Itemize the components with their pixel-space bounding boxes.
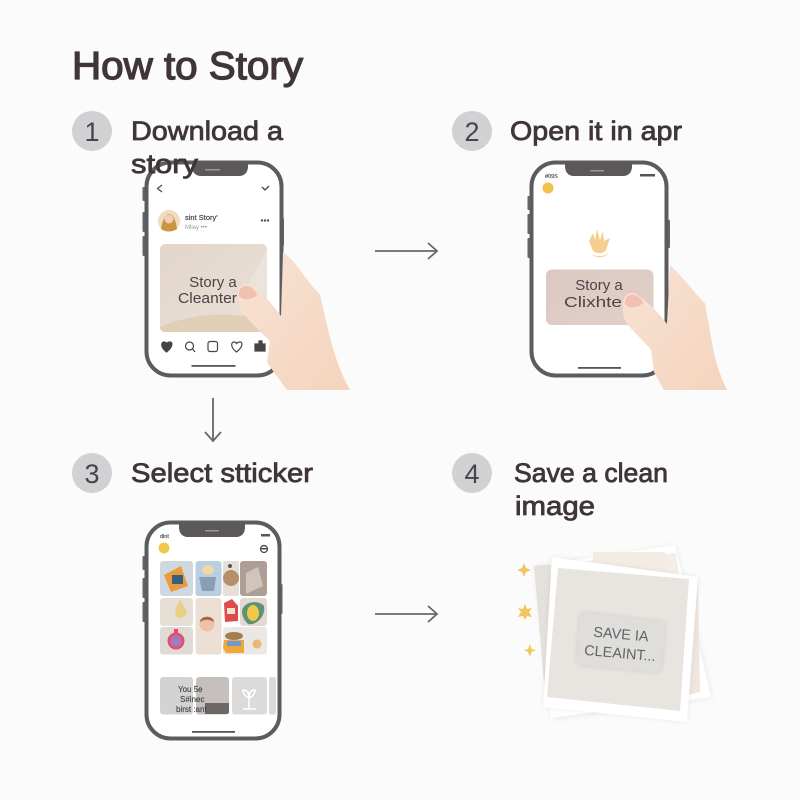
step 4 panel [452, 453, 713, 722]
step 1 heading: story [131, 149, 199, 179]
step 3 panel [72, 453, 313, 738]
profile name: sint Story' [185, 213, 218, 222]
post image card: Cleanter [178, 290, 237, 307]
step 2 hand [623, 265, 727, 390]
step 4 number badge: 4 [464, 459, 480, 489]
sparkle 2 [518, 604, 532, 620]
settings icon [260, 546, 268, 552]
step 2 sticker card: Clixhte [564, 294, 622, 311]
step 2 sticker card: Story a [575, 277, 623, 294]
step 2 phone [528, 162, 670, 376]
home indicator [192, 731, 235, 733]
yellow avatar [158, 542, 170, 554]
home indicator [578, 367, 621, 369]
waving hand icon [589, 229, 610, 257]
arrow: step 3 to step 4 [375, 606, 437, 622]
sticker grid: birst :ant [176, 705, 207, 714]
back chevron [158, 185, 162, 192]
saved sticker label: CLEAINT... [583, 643, 656, 665]
status time: #09S [545, 174, 558, 180]
title: How to Story [72, 45, 304, 88]
sticker grid: You 5e [178, 685, 203, 694]
step 4 number badge [452, 453, 492, 493]
step 3 phone with sticker grid [142, 522, 282, 738]
sticker grid: S#inec [180, 695, 204, 704]
step 1 number badge: 1 [84, 117, 100, 147]
status icons [261, 534, 270, 536]
profile subtext: Mliay ••• [185, 225, 207, 231]
step 4 heading: Save a clean [514, 458, 668, 488]
saved sticker label [577, 613, 665, 672]
step 2 sticker card [546, 270, 654, 325]
step 2 panel [452, 111, 727, 390]
status icons [640, 174, 655, 176]
sticker grid [160, 561, 276, 714]
status time: dint [160, 534, 169, 540]
arrow: step 1 to step 2 [375, 243, 437, 259]
saved sticker label: SAVE IA [593, 625, 649, 645]
step 1 heading [131, 116, 284, 179]
step 1 heading: Download a [131, 116, 284, 146]
sparkle 1 [517, 563, 531, 577]
step 2 number badge [452, 111, 492, 151]
step 1 number badge [72, 111, 112, 151]
yellow avatar [542, 182, 554, 194]
home indicator [192, 365, 236, 367]
sparkle 3 [524, 644, 536, 657]
step 1 panel [72, 111, 350, 390]
step 3 number badge [72, 453, 112, 493]
step 3 heading: Select stticker [131, 458, 313, 488]
post image card: Story a [189, 274, 237, 291]
arrow: step 1 to step 3 [205, 398, 221, 441]
share icon [262, 186, 269, 190]
step 4 heading [514, 458, 668, 521]
stacked photo prints [534, 545, 713, 722]
step 1 phone with post [142, 162, 284, 376]
post image card [160, 244, 267, 332]
post action icons [162, 341, 265, 352]
step 2 number badge: 2 [464, 117, 480, 147]
step 4 heading: image [515, 491, 595, 521]
step 2 heading: Open it in apr [510, 116, 682, 146]
step 1 hand [238, 252, 350, 390]
profile avatar [158, 210, 180, 232]
more menu [261, 219, 269, 222]
step 3 number badge: 3 [84, 459, 100, 489]
